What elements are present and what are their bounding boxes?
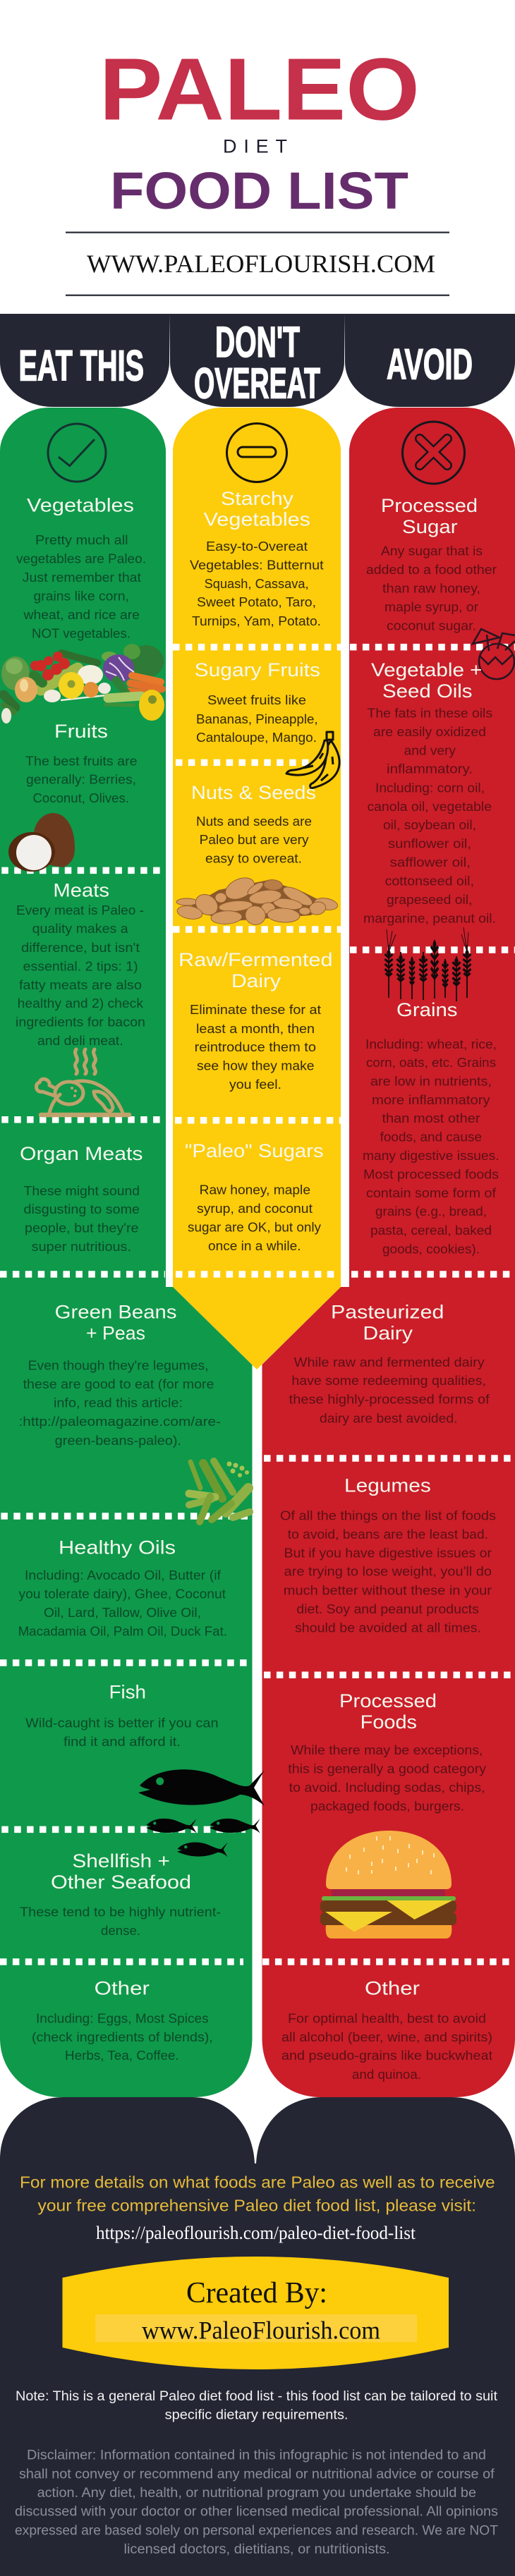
text: raw/fermented dairy: reintroduce them to <box>195 1039 316 1054</box>
heading: green beans + peas <box>55 1302 176 1344</box>
text: more details: your free comprehensive Paleo diet food list, please visit: <box>38 2196 476 2214</box>
text: nuts and seeds: Nuts and seeds are <box>196 814 312 829</box>
text: paleo sugars: sugar are OK, but only <box>188 1220 322 1234</box>
text: other (eat): Including: Eggs, Most Spices <box>36 2010 209 2025</box>
text: nuts and seeds: Paleo but are very <box>200 832 309 847</box>
text: vegetable + seed oils: are easily oxidized <box>373 724 486 739</box>
text: disclaimer: action. Any diet, health, or nutritional program you undertake should be <box>37 2486 476 2501</box>
header: DON'T OVEREAT: DON'T <box>215 318 300 366</box>
text: grains: contain some form of <box>366 1185 497 1200</box>
text: raw/fermented dairy <box>190 1002 321 1092</box>
header: DON'T OVEREAT <box>194 318 320 408</box>
link: https://paleoflourish.com/paleo-diet-food-list <box>96 2223 416 2243</box>
badge: created by <box>62 2257 449 2369</box>
heading: sugary fruits: Sugary Fruits <box>195 659 320 680</box>
text: legumes <box>280 1508 496 1635</box>
text: fruits: generally: Berries, <box>26 772 136 787</box>
icon: wheat <box>385 927 471 1001</box>
text: vegetable + seed oils: Including: corn oil, <box>375 780 485 795</box>
text: meats: quality makes a <box>32 921 128 936</box>
text: processed sugar <box>366 543 497 633</box>
panel: eat this (green column) <box>0 408 265 2097</box>
heading: pasteurized dairy: Pasteurized <box>331 1302 444 1323</box>
text: organ meats: super nutritious. <box>32 1239 131 1254</box>
title: PALEO: PALEO <box>99 41 420 138</box>
heading: starchy vegetables <box>204 488 310 530</box>
text: meats: ingredients for bacon <box>16 1015 145 1030</box>
text: grains: many digestive issues. <box>363 1148 499 1163</box>
text: processed foods: this is generally a good category <box>288 1761 487 1776</box>
text: meats: healthy and 2) check <box>18 996 144 1011</box>
icon: burger <box>320 1831 456 1939</box>
text: legumes: are trying to lose weight, you'll do <box>284 1564 492 1579</box>
text: fruits <box>25 753 138 805</box>
text: meats <box>16 903 145 1048</box>
text: vegetables: grains like corn, <box>34 588 129 603</box>
text: processed sugar: coconut sugar. <box>387 618 476 633</box>
heading: legumes: Legumes <box>344 1475 431 1496</box>
text: fish: Wild-caught is better if you can <box>25 1716 219 1730</box>
text: vegetable + seed oils: safflower oil, <box>390 855 471 869</box>
text: green beans + peas: green-beans-paleo). <box>55 1433 181 1448</box>
text: organ meats: These might sound <box>24 1183 140 1198</box>
text: grains: Most processed foods <box>363 1166 499 1182</box>
text: meats: difference, but isn't <box>21 940 140 955</box>
text: disclaimer: Disclaimer: Information contained in this infographic is not intended to and <box>27 2448 486 2463</box>
text: starchy vegetables: Vegetables: Butternut <box>190 557 324 572</box>
text: paleo sugars: Raw honey, maple <box>200 1183 310 1197</box>
text: vegetable + seed oils: sunflower oil, <box>388 836 471 851</box>
text: vegetable + seed oils: grapeseed oil, <box>387 892 473 907</box>
heading: raw/fermented dairy: Dairy <box>231 970 281 991</box>
text: note: specific dietary requirements. <box>165 2408 348 2423</box>
icon: check mark <box>48 424 106 482</box>
text: grains: pasta, cereal, baked <box>370 1223 492 1238</box>
text: pasteurized dairy: these highly-processed forms of <box>289 1392 490 1407</box>
header: EAT THIS: EAT THIS <box>18 342 144 390</box>
text: legumes: should be avoided at all times. <box>295 1620 481 1635</box>
text: paleo sugars: once in a while. <box>208 1238 301 1253</box>
text: pasteurized dairy: dairy are best avoided. <box>320 1410 457 1425</box>
text: other (avoid): all alcohol (beer, wine, and spirits) <box>281 2029 492 2044</box>
text: legumes: diet. Soy and peanut products <box>296 1601 479 1616</box>
icon: bananas <box>286 732 339 788</box>
text: other (eat): (check ingredients of blends), <box>32 2029 213 2044</box>
text: grains: more inflammatory <box>372 1092 490 1107</box>
text: raw/fermented dairy: you feel. <box>229 1077 281 1092</box>
text: legumes: Of all the things on the list of foods <box>280 1508 496 1523</box>
text: starchy vegetables: Squash, Cassava, <box>205 576 309 591</box>
text: pasteurized dairy <box>289 1355 490 1425</box>
text: more details: For more details on what foods are Paleo as well as to receive <box>20 2173 495 2192</box>
title block <box>66 41 449 296</box>
icon: large fish <box>138 1769 265 1806</box>
text: vegetables: Just remember that <box>23 570 141 585</box>
text: disclaimer <box>15 2448 498 2557</box>
text: vegetables: wheat, and rice are <box>23 607 140 622</box>
heading: healthy oils: Healthy Oils <box>59 1537 176 1558</box>
heading: green beans + peas: Green Beans <box>55 1302 176 1323</box>
text: more details <box>20 2173 495 2214</box>
text: other (avoid): and pseudo-grains like buckwheat <box>281 2048 492 2063</box>
heading: fish: Fish <box>109 1681 146 1702</box>
icon: coconut <box>8 813 75 872</box>
text: processed foods <box>288 1742 487 1814</box>
text: shellfish + other seafood <box>20 1905 221 1938</box>
text: starchy vegetables <box>190 539 324 628</box>
text: green beans + peas: info, read this article: <box>54 1396 183 1410</box>
icon: peas <box>189 1461 250 1522</box>
text: vegetable + seed oils: The fats in these oils <box>367 705 492 721</box>
heading: shellfish + other seafood <box>51 1850 191 1893</box>
text: organ meats: disgusting to some <box>24 1202 140 1216</box>
heading: grains: Grains <box>396 999 457 1020</box>
text: green beans + peas: these are good to eat (for more <box>23 1376 214 1391</box>
text: grains: Including: wheat, rice, <box>365 1037 497 1051</box>
text: meats: fatty meats are also <box>19 977 142 992</box>
text: vegetables <box>16 532 146 641</box>
text: vegetable + seed oils: and very <box>404 743 456 758</box>
text: sugary fruits: Sweet fruits like <box>207 692 306 707</box>
heading: other (avoid): Other <box>365 1978 420 1999</box>
text: note <box>16 2389 498 2423</box>
badge: created by: Created By: <box>186 2277 327 2309</box>
text: healthy oils: Macadamia Oil, Palm Oil, Duck Fat. <box>18 1624 227 1639</box>
text: processed foods: to avoid. Including sodas, chips, <box>289 1780 485 1795</box>
heading: shellfish + other seafood: Other Seafood <box>51 1872 191 1893</box>
text: meats: and deli meat. <box>37 1033 123 1048</box>
icon: vegetables pile <box>1 644 164 724</box>
heading: vegetable + seed oils <box>371 659 483 702</box>
heading: pasteurized dairy <box>331 1302 444 1344</box>
text: legumes: much better without these in your <box>284 1582 492 1598</box>
text: disclaimer: expressed are based solely on personal experiences and research. We are NOT <box>15 2523 498 2538</box>
icon: roast chicken <box>36 1049 129 1115</box>
text: raw/fermented dairy: Eliminate these for at <box>190 1002 321 1017</box>
text: processed sugar: maple syrup, or <box>384 599 478 614</box>
text: fish: find it and afford it. <box>63 1734 181 1749</box>
heading: vegetables: Vegetables <box>27 495 134 516</box>
icon: x mark <box>402 422 464 484</box>
text: other (eat) <box>32 2010 213 2063</box>
text: organ meats <box>24 1183 140 1254</box>
panel: avoid (red column) <box>262 408 515 2097</box>
text: sugary fruits <box>196 692 318 745</box>
text: vegetable + seed oils <box>363 705 496 926</box>
text: fruits: The best fruits are <box>25 753 138 768</box>
heading: paleo sugars: "Paleo" Sugars <box>185 1140 324 1161</box>
heading: fruits: Fruits <box>54 721 108 742</box>
text: meats: essential. 2 tips: 1) <box>23 958 138 973</box>
text: fish <box>25 1716 219 1749</box>
text: grains: foods, and cause <box>380 1130 482 1144</box>
website url: WWW.PALEOFLOURISH.COM <box>87 250 435 278</box>
text: disclaimer: discussed with your doctor or other licensed medical professional. All opinions <box>15 2505 498 2520</box>
text: vegetables: NOT vegetables. <box>32 626 131 641</box>
text: meats: Every meat is Paleo - <box>16 903 144 917</box>
title: FOOD LIST: FOOD LIST <box>110 161 408 220</box>
text: starchy vegetables: Easy-to-Overeat <box>206 539 308 554</box>
icon: almonds <box>176 874 339 927</box>
text: nuts and seeds: easy to overeat. <box>205 851 302 866</box>
text: organ meats: people, but they're <box>25 1221 138 1235</box>
text: paleo sugars <box>188 1183 322 1253</box>
text: vegetable + seed oils: cottonseed oil, <box>385 873 474 889</box>
text: sugary fruits: Bananas, Pineapple, <box>196 712 318 726</box>
text: disclaimer: shall not convey or recommend any medical or nutritional advice or course of <box>19 2467 495 2482</box>
text: pasteurized dairy: have some redeeming qualities, <box>291 1373 486 1388</box>
text: green beans + peas <box>18 1357 221 1448</box>
text: processed foods: While there may be exceptions, <box>291 1742 483 1757</box>
text: other (avoid): For optimal health, best to avoid <box>288 2010 486 2025</box>
text: vegetables: vegetables are Paleo. <box>16 551 146 566</box>
text: grains: are low in nutrients, <box>370 1073 492 1089</box>
text: legumes: But if you have digestive issues or <box>284 1545 492 1560</box>
text: healthy oils: Oil, Lard, Tallow, Olive Oil, <box>44 1605 201 1620</box>
text: grains: goods, cookies). <box>382 1241 480 1257</box>
text: processed foods: packaged foods, burgers. <box>310 1799 464 1814</box>
text: grains: than most other <box>382 1111 480 1125</box>
text: processed sugar: added to a food other <box>366 562 497 577</box>
text: other (avoid): and quinoa. <box>352 2067 421 2082</box>
text: healthy oils: you tolerate dairy), Ghee, Coconut <box>18 1587 226 1601</box>
text: raw/fermented dairy: see how they make <box>197 1058 315 1073</box>
text: grains: grains (e.g., bread, <box>375 1204 487 1219</box>
heading: other (eat): Other <box>95 1978 150 1999</box>
heading: pasteurized dairy: Dairy <box>363 1323 413 1344</box>
heading: processed foods: Processed <box>339 1690 437 1711</box>
heading: processed sugar: Processed <box>381 495 478 516</box>
text: raw/fermented dairy: least a month, then <box>196 1021 315 1036</box>
panel: footer <box>0 2097 515 2576</box>
text: vegetable + seed oils: canola oil, vegetable <box>367 799 492 814</box>
text: shellfish + other seafood: These tend to be highly nutrient- <box>20 1905 221 1919</box>
heading: raw/fermented dairy <box>178 949 333 991</box>
heading: processed sugar: Sugar <box>402 516 458 537</box>
heading: vegetable + seed oils: Vegetable + <box>371 659 483 680</box>
heading: starchy vegetables: Vegetables <box>204 508 310 530</box>
text: sugary fruits: Cantaloupe, Mango. <box>196 730 317 745</box>
text: processed sugar: than raw honey, <box>382 581 480 596</box>
text: grains: corn, oats, etc. Grains <box>366 1055 496 1070</box>
heading: processed foods: Foods <box>360 1711 417 1733</box>
heading: processed sugar <box>381 495 478 537</box>
text: paleo sugars: syrup, and coconut <box>197 1201 313 1216</box>
heading: starchy vegetables: Starchy <box>221 488 294 509</box>
text: shellfish + other seafood: dense. <box>101 1923 140 1938</box>
text: other (eat): Herbs, Tea, Coffee. <box>65 2048 179 2063</box>
text: other (avoid) <box>281 2010 492 2082</box>
text: healthy oils <box>18 1568 227 1639</box>
subtitle: DIET: DIET <box>223 136 287 157</box>
text: green beans + peas: Even though they're legumes, <box>28 1357 209 1372</box>
heading: raw/fermented dairy: Raw/Fermented <box>178 949 333 970</box>
column headers <box>0 314 515 408</box>
text: disclaimer: licensed doctors, dietitians, or nutritionists. <box>124 2542 390 2557</box>
heading: processed foods <box>339 1690 437 1733</box>
icon: small fish <box>146 1819 260 1857</box>
text: vegetables: Pretty much all <box>35 532 128 547</box>
text: pasteurized dairy: While raw and fermented dairy <box>294 1355 485 1369</box>
icon: coconut drink <box>473 629 515 679</box>
heading: vegetable + seed oils: Seed Oils <box>382 680 473 702</box>
text: nuts and seeds <box>196 814 312 866</box>
heading: organ meats: Organ Meats <box>20 1143 143 1164</box>
text: legumes: to avoid, beans are the least bad. <box>288 1527 488 1542</box>
heading: green beans + peas: + Peas <box>86 1323 145 1344</box>
heading: meats: Meats <box>53 880 109 901</box>
text: processed sugar: Any sugar that is <box>381 543 483 558</box>
text: vegetable + seed oils: inflammatory. <box>387 762 473 776</box>
text: vegetable + seed oils: oil, soybean oil, <box>383 817 476 832</box>
heading: nuts and seeds: Nuts & Seeds <box>191 782 316 803</box>
text: vegetable + seed oils: margarine, peanut oil. <box>363 911 496 926</box>
text: starchy vegetables: Turnips, Yam, Potato. <box>192 614 321 628</box>
header: DON'T OVEREAT: OVEREAT <box>194 360 320 408</box>
text: starchy vegetables: Sweet Potato, Taro, <box>197 594 316 609</box>
heading: shellfish + other seafood: Shellfish + <box>72 1850 170 1872</box>
text: grains <box>363 1037 499 1257</box>
text: note: Note: This is a general Paleo diet food list - this food list can be tailored to suit <box>16 2389 498 2404</box>
text: healthy oils: Including: Avocado Oil, Butter (if <box>25 1568 222 1582</box>
icon: minus <box>227 423 286 482</box>
panel: don't overeat (yellow column) <box>173 408 341 1369</box>
text: green beans + peas: :http://paleomagazine.com/are- <box>18 1414 221 1429</box>
text: fruits: Coconut, Olives. <box>32 790 129 805</box>
badge: created by: www.PaleoFlourish.com <box>142 2316 380 2344</box>
